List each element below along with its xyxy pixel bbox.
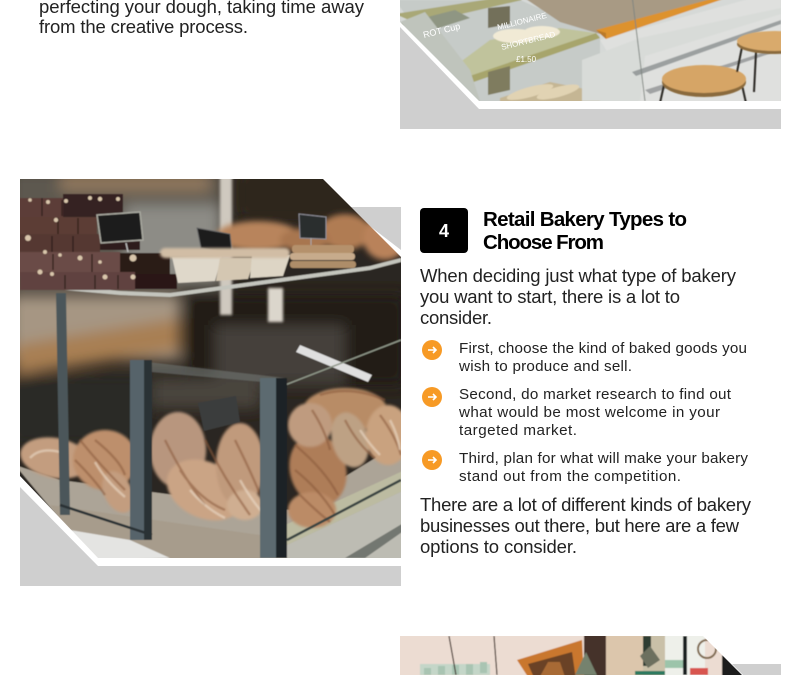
- grey frame behind shop photo: [732, 664, 781, 675]
- photo: glass counter and wooden stools: [395, 0, 800, 105]
- bullet 2: what would be most welcome in your: [458, 404, 720, 421]
- shelf: [20, 258, 401, 297]
- photo: glass counter and wooden stools: MILLIONAIRE: [496, 11, 548, 32]
- photo: glass counter and wooden stools: SHORTBREAD: [500, 30, 556, 52]
- metal posts: [56, 293, 401, 558]
- muffins and cookies: [160, 245, 356, 283]
- panel: bakery display case photo with grey frame: [10, 170, 410, 586]
- grey frame behind counter photo: [400, 27, 781, 129]
- panel: bakery counter photo with grey frame: [395, 0, 800, 129]
- photo: glass counter and wooden stools: ROT Cup: [422, 21, 461, 40]
- heading text: Choose From: [483, 231, 604, 254]
- photo: glass counter and wooden stools: £1.50: [516, 55, 537, 64]
- heading text: Retail Bakery Types to: [483, 208, 687, 231]
- section heading: number badge and title: [420, 208, 687, 254]
- bullet 3: [422, 450, 748, 485]
- panel: text continued from section 3: [39, 0, 365, 37]
- bullet 3: Third, plan for what will make your bakery: [459, 450, 748, 467]
- display floor: [20, 456, 401, 558]
- photo: brownies and pastries in display case: [10, 170, 410, 565]
- intro paragraph: [420, 265, 737, 328]
- bullet list: [422, 340, 748, 485]
- bullet 2: targeted market.: [459, 422, 577, 439]
- closing paragraph: options to consider.: [420, 536, 577, 557]
- photo: shop interior with crate and lanterns: [400, 636, 742, 675]
- pastries: [17, 388, 410, 532]
- closing paragraph: There are a lot of different kinds of bakery: [420, 494, 752, 515]
- intro paragraph: you want to start, there is a lot to: [420, 286, 680, 307]
- croissants blurred: [216, 214, 407, 260]
- lower price sign: [198, 396, 240, 431]
- bullet 3: stand out from the competition.: [459, 468, 681, 485]
- panel: next section photo with grey frame: [400, 636, 781, 675]
- brownies: [15, 194, 177, 290]
- heading text: [483, 208, 687, 254]
- closing paragraph: [420, 494, 752, 557]
- bullet 1: First, choose the kind of baked goods you: [459, 340, 747, 357]
- bullet 2: [422, 386, 732, 439]
- closing paragraph: businesses out there, but here are a few: [420, 515, 740, 536]
- number badge: [420, 208, 468, 253]
- grey frame behind display photo: [20, 207, 401, 586]
- price signs: [97, 212, 326, 253]
- panel: text continued from section 3: from the creative process.: [39, 16, 248, 37]
- glass rail and label bar: [296, 345, 372, 382]
- intro paragraph: When deciding just what type of bakery: [420, 265, 737, 286]
- bullet 1: [422, 340, 747, 375]
- intro paragraph: consider.: [420, 307, 492, 328]
- number badge: 4: [439, 221, 449, 241]
- bullet 2: Second, do market research to find out: [459, 386, 732, 403]
- bullet 1: wish to produce and sell.: [458, 358, 632, 375]
- stools: [658, 30, 781, 101]
